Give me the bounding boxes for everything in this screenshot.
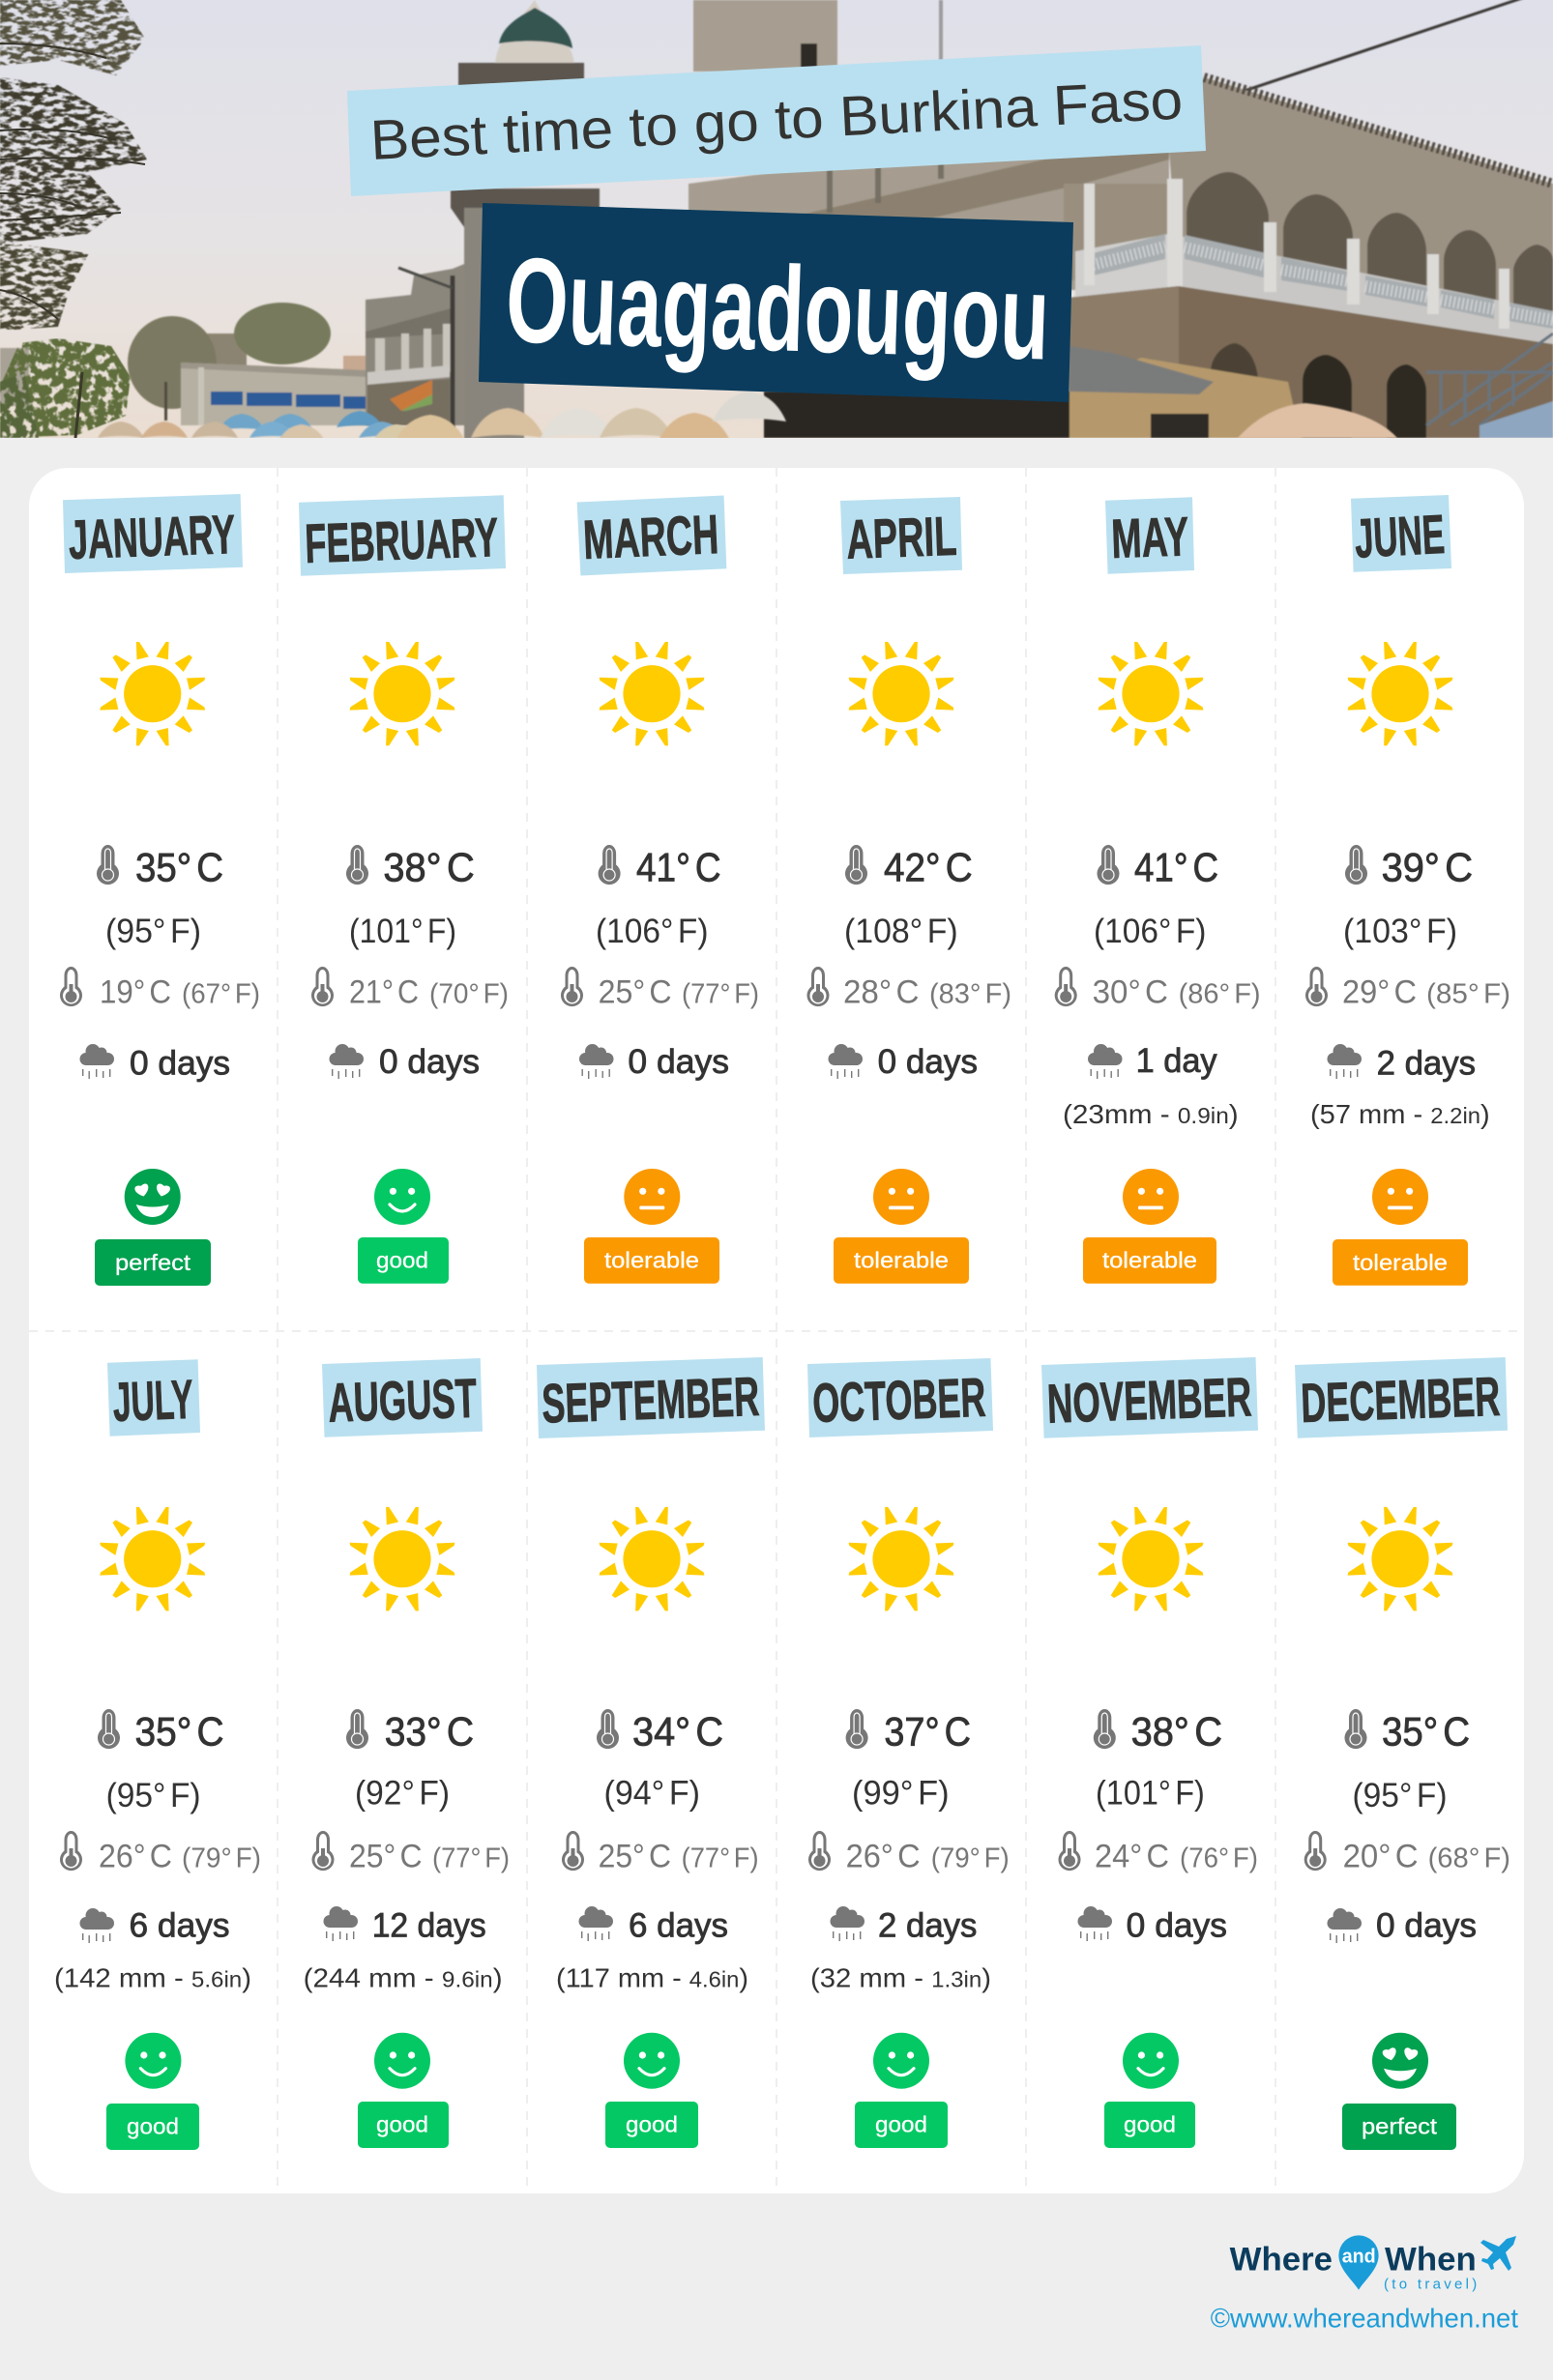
low temperature: 20° C bbox=[1343, 1839, 1419, 1875]
low temperature: (68° F) bbox=[1428, 1843, 1510, 1874]
low temperature: 25° C bbox=[599, 974, 672, 1011]
rainfall bbox=[828, 1043, 978, 1081]
rainfall: 0 days bbox=[628, 1043, 729, 1081]
high temperature bbox=[97, 845, 223, 950]
high temperature bbox=[346, 845, 475, 950]
high temperature: (95° F) bbox=[1352, 1777, 1447, 1814]
month label: August bbox=[322, 1358, 483, 1437]
rating: perfect: perfect bbox=[1362, 2114, 1438, 2139]
high temperature: 38° C bbox=[383, 845, 475, 890]
balcony bbox=[1179, 236, 1553, 344]
rating: tolerable: tolerable bbox=[604, 1248, 699, 1273]
low temperature: (79° F) bbox=[931, 1843, 1010, 1874]
month label: June: JUNE bbox=[1353, 504, 1447, 570]
high temperature bbox=[597, 1709, 723, 1813]
month label: February: FEBRUARY bbox=[304, 507, 499, 575]
rating: good: good bbox=[875, 2112, 927, 2137]
rating: tolerable: tolerable bbox=[1102, 1248, 1197, 1273]
tree canopy left bbox=[0, 0, 147, 331]
rating: good bbox=[605, 2033, 698, 2148]
rating: tolerable bbox=[584, 1169, 719, 1284]
rating: tolerable: tolerable bbox=[1353, 1250, 1448, 1275]
rating: good bbox=[358, 2033, 449, 2148]
high temperature: 35° C bbox=[135, 1709, 224, 1755]
low temperature: (85° F) bbox=[1426, 979, 1510, 1010]
rating: good: good bbox=[1124, 2112, 1176, 2137]
low temperature bbox=[806, 967, 1011, 1011]
high temperature: 41° C bbox=[636, 845, 721, 890]
low temperature: 26° C bbox=[846, 1839, 921, 1875]
low temperature: 21° C bbox=[349, 974, 419, 1011]
month label: April: APRIL bbox=[845, 506, 957, 571]
logo: Where and When: (to travel) bbox=[1384, 2277, 1477, 2293]
rainfall bbox=[810, 1906, 991, 1993]
icon: sun bbox=[350, 1507, 454, 1611]
high temperature: (108° F) bbox=[844, 913, 958, 950]
low temperature: 19° C bbox=[100, 974, 171, 1011]
logo: Where and When: Where bbox=[1230, 2241, 1333, 2278]
low building bbox=[181, 363, 367, 425]
high temperature: (95° F) bbox=[105, 913, 201, 950]
upper left facade bbox=[689, 121, 1169, 290]
month label: May bbox=[1105, 497, 1194, 574]
high temperature: 38° C bbox=[1131, 1709, 1222, 1755]
month label: March: MARCH bbox=[582, 504, 719, 571]
icon: map pin bbox=[1338, 2235, 1379, 2290]
rainfall: 0 days bbox=[130, 1045, 230, 1083]
heading banner: Best time to go to Burkina Faso: Best time to go to Burkina Faso bbox=[368, 69, 1185, 172]
icon: sun bbox=[849, 1507, 953, 1611]
panel: July bbox=[54, 1359, 261, 2150]
high temperature: (101° F) bbox=[1096, 1775, 1205, 1813]
low temperature bbox=[60, 967, 260, 1011]
month label: May: MAY bbox=[1110, 506, 1189, 570]
month label: April bbox=[840, 497, 962, 574]
high temperature bbox=[98, 1709, 224, 1814]
high temperature bbox=[1344, 1709, 1470, 1814]
rating: good: good bbox=[376, 2112, 428, 2137]
icon: sun bbox=[100, 642, 205, 745]
arches bbox=[1187, 172, 1269, 269]
high temperature: 34° C bbox=[632, 1709, 723, 1755]
low temperature: 25° C bbox=[349, 1839, 422, 1875]
rainfall: (244 mm - 9.6in) bbox=[304, 1963, 503, 1993]
high temperature: (101° F) bbox=[349, 913, 456, 950]
panel: June bbox=[1305, 495, 1510, 1286]
rainfall: (142 mm - 5.6in) bbox=[54, 1963, 251, 1993]
low temperature bbox=[311, 1831, 510, 1875]
panel: May bbox=[1055, 497, 1261, 1284]
icon: sun bbox=[600, 642, 704, 745]
rating: tolerable bbox=[1333, 1169, 1468, 1286]
month label: June bbox=[1351, 495, 1451, 572]
icon: sun bbox=[849, 642, 953, 745]
green trees bbox=[0, 338, 131, 438]
low temperature: (77° F) bbox=[682, 979, 759, 1010]
white card holding the calendar bbox=[29, 468, 1524, 2193]
rainfall bbox=[1327, 1906, 1477, 1944]
rainfall: 2 days bbox=[1377, 1045, 1476, 1083]
panel: August bbox=[304, 1358, 510, 2148]
left building bbox=[366, 256, 483, 425]
high temperature: 42° C bbox=[884, 845, 973, 890]
low temperature bbox=[1055, 967, 1261, 1011]
panel: February bbox=[299, 495, 509, 1284]
ground floor bbox=[1069, 286, 1553, 438]
rating: perfect: perfect bbox=[115, 1250, 191, 1275]
low temperature bbox=[1304, 1831, 1510, 1875]
title banner: Ouagadougou bbox=[479, 203, 1073, 402]
rainfall bbox=[304, 1906, 503, 1993]
month label: January bbox=[63, 494, 243, 573]
high temperature: (106° F) bbox=[1094, 913, 1206, 950]
rainfall: 0 days bbox=[878, 1043, 978, 1081]
low temperature bbox=[561, 967, 759, 1011]
month label: February bbox=[299, 495, 506, 576]
icon: plane bbox=[1480, 2236, 1516, 2271]
rainfall bbox=[556, 1906, 748, 1993]
main wall bbox=[1169, 77, 1553, 344]
icon: sun bbox=[600, 1507, 704, 1611]
low temperature: (83° F) bbox=[929, 979, 1011, 1010]
month label: September: SEPTEMBER bbox=[541, 1366, 760, 1436]
low temperature: (77° F) bbox=[682, 1843, 759, 1874]
rating: tolerable bbox=[834, 1169, 969, 1284]
low temperature: 30° C bbox=[1093, 974, 1168, 1011]
rainfall: 2 days bbox=[878, 1906, 977, 1944]
rainfall: (117 mm - 4.6in) bbox=[556, 1963, 748, 1993]
month label: November: NOVEMBER bbox=[1046, 1366, 1252, 1436]
panel: October bbox=[807, 1358, 1010, 2148]
icon: sun bbox=[100, 1507, 205, 1611]
month label: September bbox=[537, 1357, 765, 1438]
low temperature: 29° C bbox=[1342, 974, 1417, 1011]
month label: August: AUGUST bbox=[327, 1368, 478, 1435]
icon: sun bbox=[1099, 642, 1203, 745]
high temperature bbox=[844, 845, 973, 950]
high temperature bbox=[596, 845, 721, 950]
rainfall bbox=[54, 1906, 251, 1993]
rainfall: 0 days bbox=[1127, 1906, 1227, 1944]
rating: good: good bbox=[376, 1248, 428, 1273]
icon: sun bbox=[1099, 1507, 1203, 1611]
rainfall bbox=[1310, 1044, 1490, 1129]
rainfall: (23mm - 0.9in) bbox=[1063, 1099, 1239, 1129]
rainfall bbox=[579, 1043, 729, 1081]
rainfall bbox=[79, 1044, 230, 1083]
high temperature bbox=[346, 1709, 474, 1813]
high temperature: (103° F) bbox=[1343, 913, 1457, 950]
high temperature: 37° C bbox=[884, 1709, 971, 1755]
high temperature: 33° C bbox=[385, 1709, 474, 1755]
low temperature: (70° F) bbox=[429, 979, 509, 1010]
panel: December bbox=[1295, 1357, 1510, 2150]
rainfall: 1 day bbox=[1136, 1042, 1217, 1080]
minaret bbox=[451, 0, 600, 440]
high temperature bbox=[1094, 1709, 1222, 1813]
low temperature bbox=[1058, 1831, 1258, 1875]
panel: November bbox=[1041, 1357, 1258, 2148]
central tower bbox=[693, 0, 837, 72]
high temperature: (94° F) bbox=[603, 1775, 700, 1813]
month label: October bbox=[807, 1358, 993, 1437]
month label: July bbox=[107, 1359, 200, 1437]
high temperature: (95° F) bbox=[106, 1777, 201, 1814]
icon: sun bbox=[1348, 642, 1452, 745]
high temperature: (92° F) bbox=[355, 1775, 450, 1813]
hero photo: mosque in Ouagadougou bbox=[0, 0, 1553, 438]
high temperature: (99° F) bbox=[852, 1775, 950, 1813]
posts bbox=[1084, 179, 1509, 329]
rainfall: 6 days bbox=[629, 1906, 728, 1944]
rating: good bbox=[106, 2033, 199, 2150]
title banner: Ouagadougou: Ouagadougou bbox=[504, 233, 1051, 386]
rating: good bbox=[855, 2033, 948, 2148]
low temperature bbox=[60, 1831, 261, 1875]
rainfall: 6 days bbox=[130, 1906, 230, 1944]
rainfall bbox=[329, 1043, 480, 1081]
month label: March bbox=[577, 495, 726, 576]
low temperature: (76° F) bbox=[1180, 1843, 1258, 1874]
rating: good: good bbox=[626, 2112, 678, 2137]
panel: September bbox=[537, 1357, 765, 2148]
month label: November bbox=[1041, 1357, 1258, 1438]
stairs bbox=[1426, 334, 1553, 425]
background trees bbox=[128, 316, 217, 409]
low temperature bbox=[562, 1831, 759, 1875]
rating: perfect bbox=[1342, 2033, 1456, 2150]
panel: April bbox=[806, 497, 1011, 1284]
low temperature: 26° C bbox=[99, 1839, 172, 1875]
high temperature: 41° C bbox=[1134, 845, 1218, 890]
high temperature: 39° C bbox=[1382, 845, 1473, 890]
low temperature: 28° C bbox=[843, 974, 919, 1011]
rating: tolerable: tolerable bbox=[854, 1248, 949, 1273]
rating: tolerable bbox=[1083, 1169, 1216, 1284]
month label: July: JULY bbox=[111, 1369, 194, 1434]
icon: sun bbox=[1348, 1507, 1452, 1611]
rainfall: (57 mm - 2.2in) bbox=[1310, 1099, 1490, 1129]
heading banner: Best time to go to Burkina Faso bbox=[347, 45, 1206, 196]
low temperature bbox=[311, 967, 509, 1011]
rainfall bbox=[1077, 1906, 1227, 1944]
month label: January: JANUARY bbox=[68, 504, 236, 571]
low temperature: 25° C bbox=[599, 1839, 671, 1875]
high temperature bbox=[1343, 845, 1473, 950]
panel: January bbox=[60, 494, 260, 1286]
rainfall: 0 days bbox=[379, 1043, 480, 1081]
icon: sun bbox=[350, 642, 454, 745]
rating: good bbox=[1104, 2033, 1195, 2148]
rainfall: 12 days bbox=[372, 1906, 486, 1944]
rainfall: (32 mm - 1.3in) bbox=[810, 1963, 991, 1993]
month label: October: OCTOBER bbox=[811, 1367, 986, 1435]
logo: Where and When: and bbox=[1342, 2247, 1376, 2268]
copyright url: ©www.whereandwhen.net bbox=[1211, 2304, 1518, 2334]
high temperature: 35° C bbox=[1382, 1709, 1470, 1755]
flag bbox=[390, 380, 432, 411]
rainfall bbox=[1063, 1042, 1239, 1129]
high temperature: (106° F) bbox=[596, 913, 708, 950]
low temperature: (86° F) bbox=[1179, 979, 1261, 1010]
rating: perfect bbox=[95, 1169, 211, 1286]
low temperature: (67° F) bbox=[182, 979, 260, 1010]
low temperature: 24° C bbox=[1095, 1839, 1169, 1875]
high temperature: 35° C bbox=[135, 845, 223, 890]
rainfall: 0 days bbox=[1376, 1906, 1477, 1944]
low temperature: (79° F) bbox=[182, 1843, 261, 1874]
rating: good bbox=[358, 1169, 449, 1284]
low temperature bbox=[1305, 967, 1510, 1011]
panel: March bbox=[561, 495, 759, 1284]
logo: Where and When bbox=[1230, 2235, 1516, 2293]
high temperature bbox=[846, 1709, 971, 1813]
low temperature: (77° F) bbox=[432, 1843, 510, 1874]
tree branches bbox=[0, 44, 145, 319]
distant building bbox=[150, 334, 247, 372]
high temperature bbox=[1094, 845, 1218, 950]
market bbox=[764, 392, 1083, 438]
low temperature bbox=[808, 1831, 1010, 1875]
logo: Where and When: When bbox=[1385, 2241, 1477, 2278]
rating: good: good bbox=[127, 2114, 179, 2139]
market umbrellas bbox=[98, 392, 1397, 445]
